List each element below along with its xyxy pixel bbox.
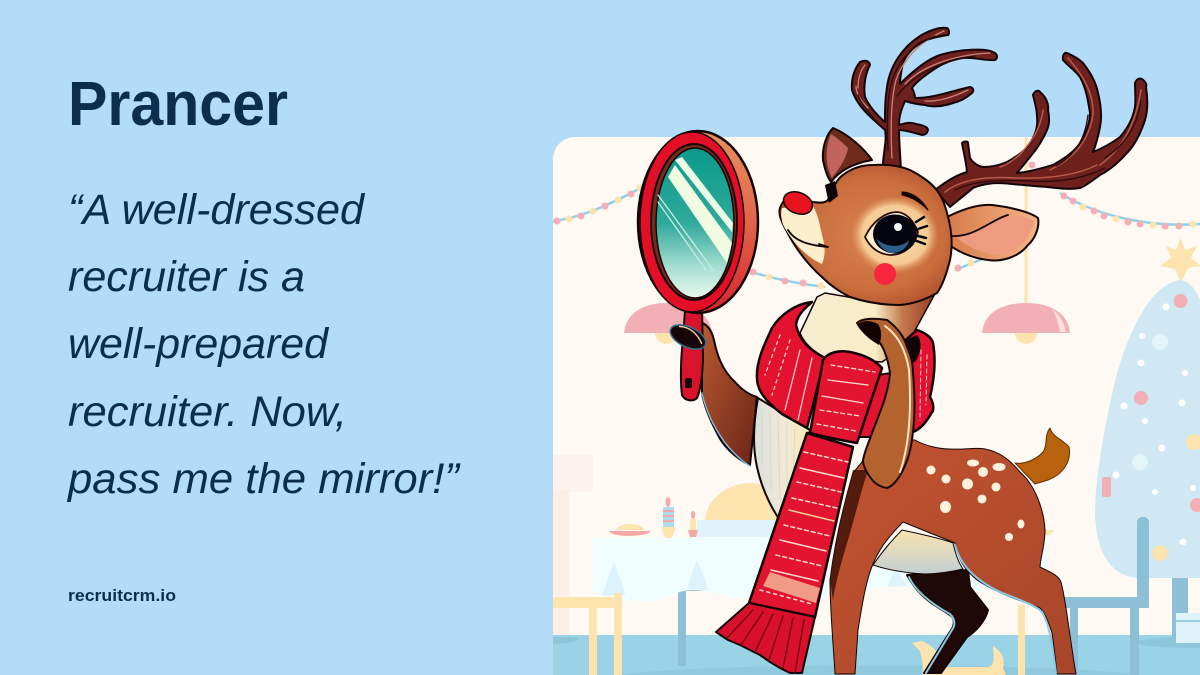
neck: [800, 290, 937, 362]
belly: [873, 530, 963, 574]
thumb: [667, 320, 709, 354]
quote text: “A well-dressed: [68, 186, 366, 234]
chest fur strokes: [762, 410, 795, 510]
mouth line: [788, 230, 828, 247]
chair: left: [553, 593, 622, 675]
mirror glass: [656, 148, 734, 298]
floor: [553, 635, 1200, 675]
small far plate: [1045, 530, 1054, 536]
plate and candles: [609, 497, 698, 538]
right ear: [947, 205, 1038, 260]
tail: [1015, 428, 1070, 484]
back leg: [907, 570, 988, 673]
right collar lobe: [895, 330, 934, 437]
scarf collar left lobe: [757, 302, 825, 428]
table legs: [678, 590, 704, 666]
title: Prancer: [68, 70, 288, 139]
collar dark inside: [905, 335, 921, 365]
eye: [865, 212, 927, 255]
mirror inner ring: [651, 144, 737, 300]
quote text: recruiter. Now,: [68, 388, 347, 436]
quote text: recruiter is a: [68, 253, 305, 301]
scarf small fold: [857, 373, 893, 437]
panel: room scene: [553, 137, 1200, 675]
scarf knit stripes: [760, 452, 848, 604]
handle slot: [685, 378, 692, 388]
mirror reflections: [658, 157, 733, 270]
christmas tree: [1095, 238, 1200, 637]
hind leg rim light: [955, 545, 1056, 673]
gift box: [1176, 613, 1200, 643]
fold knit pattern: [817, 365, 875, 431]
yellow dome: [705, 483, 777, 520]
website footer: recruitcrm.io: [68, 587, 176, 605]
hanging scarf tail: [749, 433, 853, 617]
quote text: [66, 186, 461, 503]
scarf fringe: [716, 603, 815, 673]
nose: [780, 188, 816, 218]
left ear: [823, 128, 872, 182]
foreleg highlight: [885, 326, 910, 472]
head: [779, 165, 952, 305]
wall shelf: [553, 490, 569, 635]
arm blue rim: [702, 393, 750, 466]
right collar pattern: [920, 350, 927, 420]
spots: [926, 460, 1024, 541]
foreleg raised to chest: [857, 319, 914, 488]
right antler: [935, 53, 1147, 207]
garlands: [553, 162, 1200, 290]
cheek: [874, 263, 896, 285]
lamp: left: [624, 303, 712, 344]
mirror rim: [638, 131, 758, 313]
dog: [912, 641, 1006, 675]
hoof: [857, 321, 881, 345]
blue bowl: [697, 520, 776, 537]
raised arm: [702, 323, 757, 465]
quote text: pass me the mirror!”: [66, 455, 461, 503]
quote text: well-prepared: [68, 320, 330, 368]
scarf upper fold: [810, 351, 882, 443]
yellow chair leg: [1018, 605, 1025, 675]
back leg rim: [909, 577, 954, 673]
mirror frame: [640, 132, 744, 312]
body and legs: [830, 440, 1076, 674]
muzzle: [781, 206, 825, 264]
hand mirror: [638, 131, 758, 400]
mirror handle: [681, 310, 703, 400]
table: [593, 537, 1047, 602]
collar knit pattern: [765, 335, 812, 420]
eye patch: [851, 196, 939, 274]
deer character: [638, 28, 1147, 674]
fringe strands: [727, 610, 804, 673]
lamp: right: [982, 137, 1070, 344]
eyebrow: [902, 192, 928, 210]
eyelashes left: [825, 181, 838, 203]
scarf pink band: [763, 572, 820, 603]
front body shadow: [830, 470, 868, 600]
left antler: [852, 28, 997, 170]
chair: right: [1064, 517, 1149, 675]
chest: [754, 398, 810, 528]
